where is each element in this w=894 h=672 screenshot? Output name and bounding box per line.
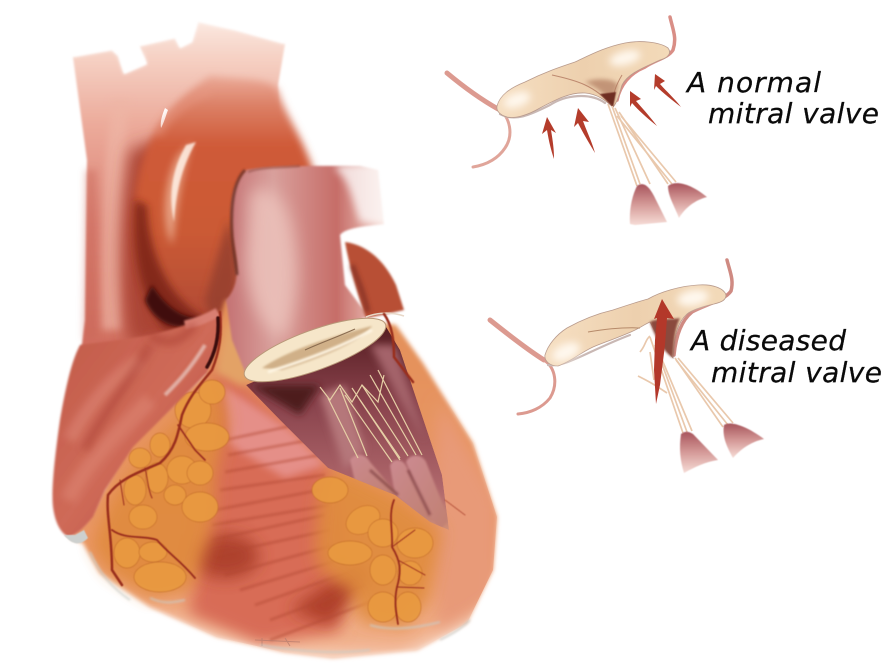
cut-away interior of the left ventricle bbox=[246, 325, 449, 530]
label: a normal mitral valve: mitral valve bbox=[708, 97, 879, 130]
label: a normal mitral valve: A normal bbox=[685, 66, 821, 99]
valve walls bbox=[447, 17, 675, 167]
superior vena cava bbox=[73, 20, 285, 360]
pulmonary artery bbox=[226, 162, 396, 372]
valve leaflet bbox=[497, 42, 670, 118]
panel: heart illustration bbox=[52, 20, 500, 672]
left atrial appendage bbox=[345, 242, 404, 318]
aortic arch bbox=[134, 76, 314, 330]
blood flow arrows bbox=[542, 74, 681, 159]
panel: normal mitral valve bbox=[447, 17, 879, 225]
mitral valve annulus bbox=[238, 306, 392, 394]
ventricle body bbox=[70, 300, 497, 658]
bottom edge highlights bbox=[90, 552, 470, 652]
regurgitant flow arrow bbox=[654, 299, 674, 404]
chordae tendineae bbox=[320, 370, 422, 462]
left lobe of the heart bbox=[52, 312, 222, 543]
papillary muscles bbox=[630, 183, 707, 225]
label: a diseased mitral valve: mitral valve bbox=[711, 356, 882, 389]
valve walls bbox=[490, 260, 732, 414]
papillary muscles bbox=[680, 424, 764, 473]
valve leaflet bbox=[545, 285, 726, 366]
signature bbox=[255, 638, 300, 646]
label: a normal mitral valve bbox=[685, 66, 879, 130]
ventricle shading and muscle bbox=[150, 368, 497, 657]
chordae bbox=[608, 104, 676, 186]
fat deposits bbox=[92, 300, 442, 628]
blood vessels bbox=[108, 312, 465, 624]
label: a diseased mitral valve: A diseased bbox=[689, 324, 846, 357]
panel: diseased mitral valve bbox=[490, 260, 882, 473]
papillary muscles bbox=[350, 455, 449, 530]
label: a diseased mitral valve bbox=[689, 324, 882, 389]
chordae bbox=[638, 336, 733, 433]
